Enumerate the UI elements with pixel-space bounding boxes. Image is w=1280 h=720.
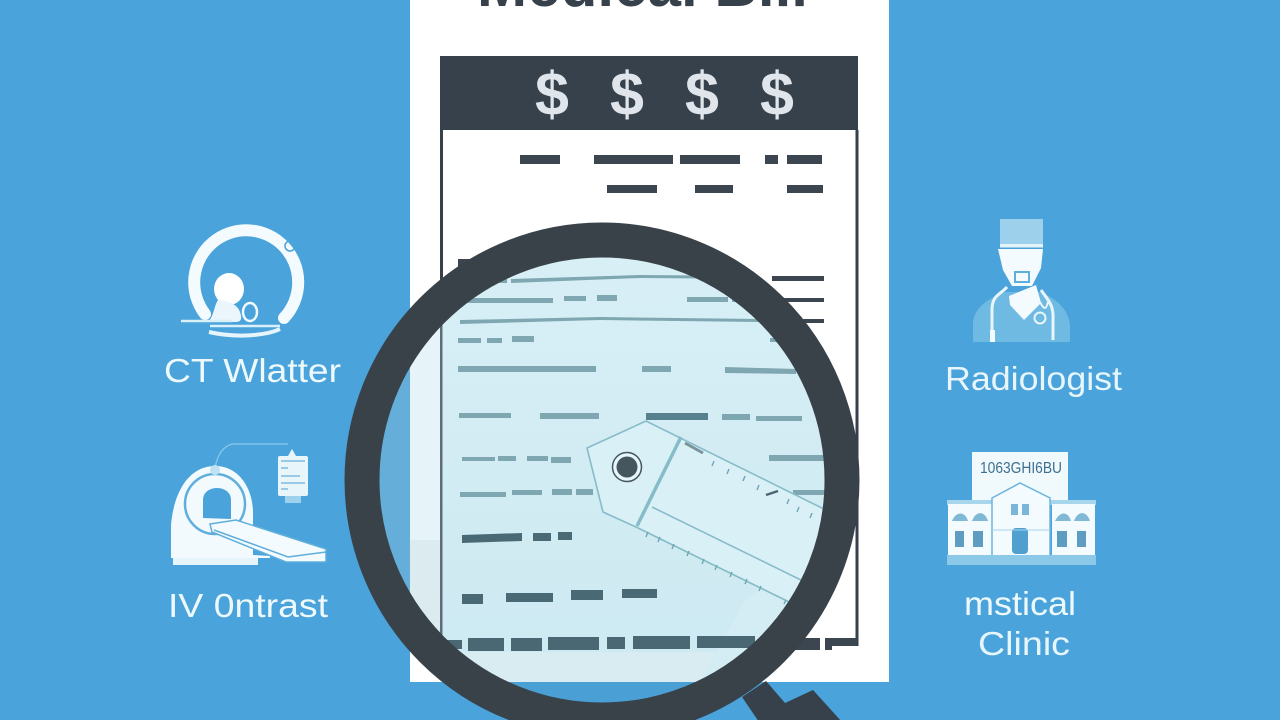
lens bill lines bbox=[441, 275, 826, 651]
ruler tag bbox=[586, 420, 823, 604]
icon: CT scanner with IV bag bbox=[171, 444, 326, 565]
icon group: CT Wlatter bbox=[164, 230, 341, 389]
infographic canvas bbox=[166, 0, 1122, 720]
icon: clinic building bbox=[947, 452, 1096, 565]
icon group: IV Ontrast bbox=[168, 444, 328, 624]
label: CT Wlatter: CT Wlatter bbox=[164, 352, 341, 389]
icon: clinic building: 1063GHI6BU bbox=[980, 460, 1062, 477]
dollar signs: $ bbox=[535, 60, 569, 128]
table header band bbox=[440, 56, 858, 130]
icon group: Radiologist bbox=[945, 219, 1122, 397]
lens glass bbox=[380, 258, 824, 682]
icon: CT ring with patient bbox=[181, 230, 298, 336]
icon: radiologist figure bbox=[973, 219, 1070, 342]
label: IV Ontrast: IV 0ntrast bbox=[168, 587, 328, 624]
handle bbox=[742, 681, 842, 720]
label: Clinic: Clinic bbox=[978, 625, 1070, 662]
icon group: medical clinic bbox=[947, 452, 1096, 662]
dollar signs: $ bbox=[685, 60, 719, 128]
dollar signs bbox=[535, 60, 794, 128]
table frame bbox=[442, 130, 857, 646]
magnifying glass bbox=[362, 240, 890, 720]
dollar signs: $ bbox=[610, 60, 644, 128]
document sheet bbox=[410, 0, 889, 682]
lens ring bbox=[362, 240, 842, 720]
label: mstical: mstical bbox=[964, 585, 1076, 622]
label: Radiologist: Radiologist bbox=[945, 360, 1122, 397]
bill lines above lens bbox=[458, 155, 857, 650]
panel: medical bill document bbox=[410, 0, 889, 682]
dollar signs: $ bbox=[760, 60, 794, 128]
